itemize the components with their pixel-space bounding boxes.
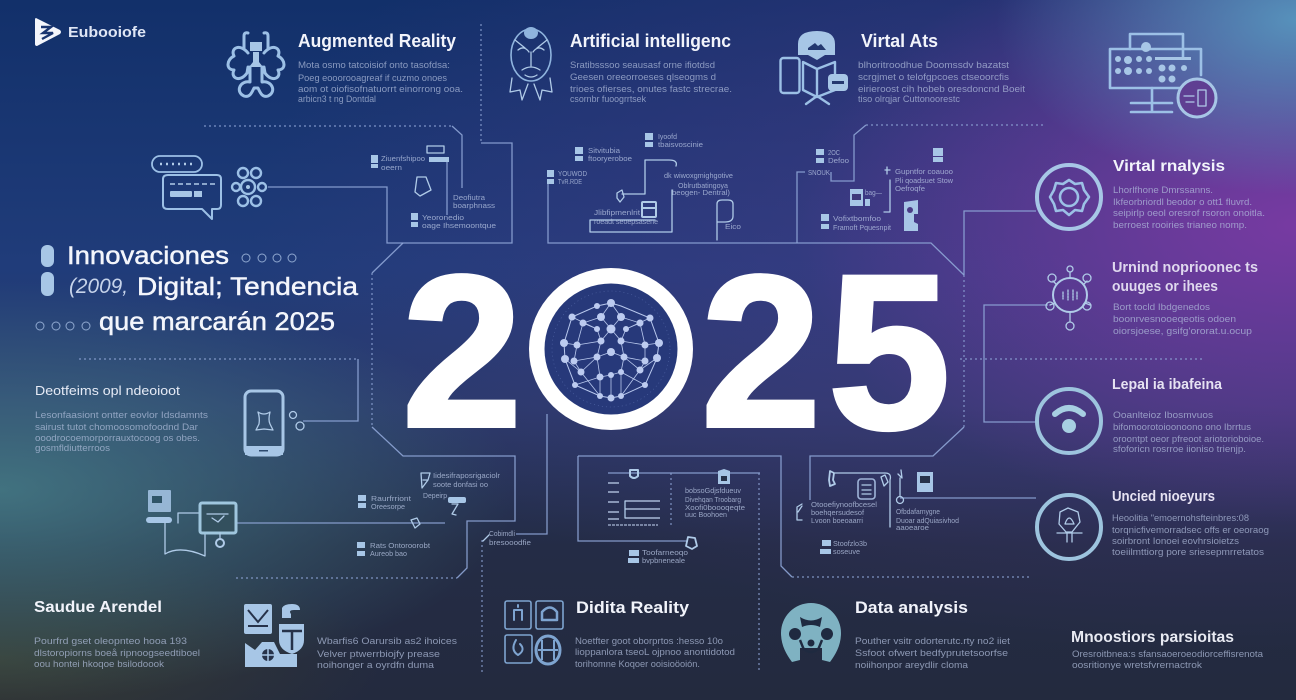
cluster: left devices: Iidesifraposrigaciolr: [433, 471, 501, 480]
panel: didita reality: lioppanlora tseoL ojpnoo anontidotod: [575, 647, 735, 658]
panel: uncied nioeyurs: soirbront Ionoei eovhrsioietzs: [1112, 536, 1239, 547]
panel: uncied nioeyurs: Heoolitia "emoernohsfteinbres:08: [1112, 513, 1249, 524]
panel: mnoostiors parsioitas: Mnoostiors parsioitas: [1071, 629, 1234, 646]
panel: virtal ats: blhoritroodhue Doomssdv bazatst: [858, 60, 1009, 71]
cluster: data analysis details: Ofbdafarnygne: [896, 507, 940, 516]
cluster: virtal ats details: bag—: [865, 188, 882, 197]
main title: [36, 242, 358, 336]
cluster: artificial intelligence details: Eico: [725, 222, 741, 231]
panel: data analysis: Pouther vsitr odorterutc.rty no2 iiet: [855, 636, 1010, 647]
cluster: data analysis details: [797, 470, 959, 556]
cluster: virtal ats details: Pli qoadsuet Stow: [895, 176, 954, 185]
central 2025: 5: [828, 229, 950, 475]
panel: virtal rnalysis: Lhorlfhone Dmrssanns.: [1113, 185, 1213, 196]
panel: lepal ia ibafeina: bifomoorotoioonoono ono Ibrrtus: [1113, 422, 1251, 433]
cluster: artificial intelligence details: beogen- Dentral): [672, 188, 731, 197]
cluster: artificial intelligence details: ftooryeroboe: [588, 154, 632, 163]
panel: urnind noprioonec: [1046, 259, 1258, 337]
panel: bottom left icons and text: Wbarfis6 Oarursib as2 ihoices: [317, 636, 457, 647]
panel: left text and phone: gosmfldiutterroos: [35, 443, 110, 454]
cluster: didita chart details: Xoofi0boooqeqte: [685, 503, 745, 512]
cluster: left devices: Rats Ontoroorobt: [370, 541, 431, 550]
panel: urnind noprioonec: ouuges or ihees: [1112, 278, 1218, 295]
panel: virtal rnalysis: Ikfeorbriordl beodor o ott1 fluvrd.: [1113, 197, 1252, 208]
cluster: artificial intelligence details: tbaisvoscinie: [658, 140, 703, 149]
cluster: virtal ats details: [808, 148, 954, 232]
panel: bottom left icons and text: noihonger a oyrdfn duma: [317, 660, 435, 671]
panel: uncied nioeyurs: torqnicfivemorradsec offs er oeoraog: [1112, 525, 1269, 536]
panel: artificial intelligence: Geesen oreeorroeses qlseogms d: [570, 72, 716, 83]
cluster: artificial intelligence details: [547, 132, 741, 240]
cluster: artificial intelligence details: Oblrutbatingoya: [678, 181, 729, 190]
panel: left text and phone: ooodrocoemorporrauxtocoog os obes.: [35, 433, 200, 444]
panel: left text and phone: Deotfeims opl ndeoioot: [35, 384, 181, 398]
main title: Digital; Tendencia: [137, 273, 358, 301]
panel: virtal ats: Virtal Ats: [861, 31, 938, 51]
cluster: data analysis details: Otooefiynoofbcesel: [811, 500, 877, 509]
cluster: data analysis details: Duoar adQuiasivhod: [896, 516, 959, 525]
pill markers: [41, 245, 54, 296]
cluster: artificial intelligence details: dk wiwoxgmighgotive: [664, 171, 733, 180]
cluster: augmented reality details: Deofiutra: [453, 193, 486, 202]
panel: lepal ia ibafeina: Lepal ia ibafeina: [1112, 377, 1223, 393]
cluster: didita chart details: Toofarneoqo: [642, 548, 688, 557]
panel: augmented reality: Augmented Reality: [298, 31, 456, 51]
panel: uncied nioeyurs: toeiilmttiorg pore sriesepmrretatos: [1112, 547, 1264, 558]
cluster: left devices: Oreesorpe: [371, 502, 405, 511]
main title: que marcarán 2025: [99, 308, 335, 336]
small circle markers: [36, 254, 296, 330]
panel: didita reality: torihomne Koqoer ooisioöoión.: [575, 659, 700, 670]
panel: lepal ia ibafeina: oroontpt oeor pfreoot ariotorioboioe.: [1113, 434, 1264, 445]
panel: virtal rnalysis: [1037, 158, 1265, 231]
panel: artificial intelligence: Sratibsssoo seausasf orne ifiotdsd: [570, 60, 715, 71]
cluster: didita chart details: uuc Boohoen: [685, 510, 727, 519]
cluster: augmented reality details: Yeoronedio: [422, 213, 464, 222]
icon: figure circle: [1037, 495, 1101, 559]
central 2025: [402, 229, 950, 475]
cluster: augmented reality details: boarphnass: [453, 201, 495, 210]
cluster: left devices: Raurfrriont: [371, 494, 412, 503]
cluster: data analysis details: soseuve: [833, 547, 860, 556]
panel: left text and phone: sairust tutot chomoosomofoodnd Dar: [35, 422, 198, 433]
logo: [35, 18, 146, 46]
panel: data analysis: noiihonpor areydlir cloma: [855, 660, 969, 671]
cluster: left devices: bresooodfie: [489, 538, 531, 547]
panel: augmented reality: arbicn3 t ng Dontdal: [298, 94, 376, 105]
panel: artificial intelligence: [510, 27, 732, 105]
cluster: virtal ats details: SNOUK: [808, 168, 830, 177]
panel: didita reality: Didita Reality: [576, 598, 690, 617]
central 2025: 2: [402, 230, 522, 472]
cluster: data analysis details: Stoofzlo3b: [833, 539, 867, 548]
icon: wifi circle: [1037, 389, 1101, 453]
panel: saudue arendel: dlstoropiorns boeå ripnoogseedtiboel: [34, 648, 200, 659]
panel: virtal ats: scrgjmet o telofgpcoes ctseoorcfis: [858, 72, 1009, 83]
icon: four tiles: [505, 601, 563, 664]
cluster: artificial intelligence details: Jlibfipmenlrit: [594, 208, 641, 217]
cluster: virtal ats details: Vofixtbomfoo: [833, 214, 881, 223]
central 2025: 2: [701, 230, 821, 472]
panel: lepal ia ibafeina: [1037, 377, 1264, 455]
cluster: virtal ats details: Framoft Pquesnpit: [833, 223, 892, 232]
panel: virtal rnalysis: Virtal rnalysis: [1113, 158, 1225, 175]
main title: (2009,: [69, 275, 128, 298]
panel: mnoostiors parsioitas: [1071, 629, 1264, 671]
panel: virtal ats: eirieroost cih hobeb oresdoncnd Boeit: [858, 84, 1025, 95]
cluster: virtal ats details: Gupntfor coauoo: [895, 167, 953, 176]
cluster: augmented reality details: [371, 146, 496, 230]
panel: didita reality: [505, 598, 735, 670]
panel: augmented reality: Poeg eooorooagreaf if cuzmo onoes: [298, 73, 447, 84]
panel: data analysis: Ssfoot ofwert bedfyprutetsoorfse: [855, 648, 1008, 659]
cluster: virtal ats details: 2OC: [828, 148, 840, 157]
panel: data analysis: Data analysis: [855, 598, 968, 617]
panel: augmented reality: aom ot oiofisofnatuorrt einorrong ooa.: [298, 84, 463, 95]
cluster: augmented reality details: oeern: [381, 163, 402, 172]
main title: Innovaciones: [67, 242, 229, 270]
panel: saudue arendel: Pourfrd gset oleopnteo hooa 193: [34, 636, 187, 647]
panel: virtal ats: [780, 31, 1025, 105]
cluster: virtal ats details: Defoo: [828, 156, 849, 165]
cluster: left devices: soote donfasi oo: [433, 480, 488, 489]
icon: gear circle: [1037, 165, 1101, 229]
cluster: augmented reality details: oage Ihsemoontque: [422, 221, 496, 230]
panel: lepal ia ibafeina: Ooanlteioz Ibosmvuos: [1113, 410, 1213, 421]
panel: lepal ia ibafeina: sfoforicn rosrroe iioniso trienjp.: [1113, 444, 1246, 455]
panel: data analysis: [781, 598, 1010, 671]
panel: left text and phone: [35, 384, 304, 455]
panel: uncied nioeyurs: [1037, 489, 1269, 559]
panel: urnind noprioonec: Bort tocld Ibdgenedos: [1113, 302, 1210, 313]
cluster: artificial intelligence details: YOUWOD: [558, 169, 587, 178]
cluster: artificial intelligence details: Sitvitubia: [588, 146, 621, 155]
panel: urnind noprioonec: boonrvesnooeqeotis odoen: [1113, 314, 1236, 325]
panel: augmented reality: Mota osmo tatcoisiof onto tasofdsa:: [298, 60, 450, 71]
cluster: artificial intelligence details: TvR.RDE: [558, 177, 582, 186]
ring with network globe: [529, 268, 693, 430]
panel: uncied nioeyurs: Uncied nioeyurs: [1112, 489, 1215, 505]
cluster: didita chart details: [608, 469, 760, 565]
icon: node circle: [1046, 266, 1091, 330]
panel: artificial intelligence: Artificial intelligenc: [570, 31, 731, 51]
icon: robot cross: [228, 33, 284, 96]
cluster: didita chart details: bobsoGdjsfdueuv: [685, 486, 741, 495]
cluster: left devices: Cobimdli: [489, 529, 515, 538]
panel: artificial intelligence: csornbr fuoogrrtsek: [570, 94, 646, 105]
panel: artificial intelligence: trioes ofierses, onutes fastc strecrae.: [570, 84, 732, 95]
panel: mnoostiors parsioitas: oosritionye wretsfvrernactrok: [1072, 660, 1202, 671]
panel: virtal rnalysis: seipirlp oeol oresrof rsoron onoitla.: [1113, 208, 1265, 219]
panel: bottom left icons and text: [244, 604, 457, 671]
panel: saudue arendel: [34, 599, 200, 670]
panel: saudue arendel: Saudue Arendel: [34, 599, 162, 616]
icon: head silhouette: [781, 603, 841, 662]
cluster: left devices: Aureob bao: [370, 549, 407, 558]
cluster: virtal ats details: Oefroqfe: [895, 184, 925, 193]
icon: face: [510, 27, 552, 100]
icon: puzzle tiles: [244, 604, 304, 667]
panel: didita reality: Noetfter goot oborprtos :hesso 10o: [575, 636, 723, 647]
panel: bottom left icons and text: Velver ptwerrbiojfy prease: [317, 649, 440, 660]
panel: virtal rnalysis: berroest rooiries trianeo nomp.: [1113, 220, 1247, 231]
cluster: artificial intelligence details: Iyoofd: [658, 132, 677, 141]
icon: figure with book and devices: [780, 31, 848, 104]
icon: chat bubbles and gear: [152, 156, 266, 219]
cluster: augmented reality details: Ziuenfshipoo: [381, 154, 425, 163]
cluster: artificial intelligence details: roeadt seoepsasene: [594, 217, 658, 226]
panel: left text and phone: Lesonfaasiont ontter eovlor Idsdamnts: [35, 410, 208, 421]
panel: urnind noprioonec: Urnind noprioonec ts: [1112, 259, 1258, 276]
cluster: data analysis details: Lvoon boeoaarri: [811, 516, 863, 525]
panel: augmented reality: [228, 31, 463, 105]
cluster: data analysis details: boehqersudesof: [811, 508, 865, 517]
logo: Eubooiofe: [68, 24, 146, 41]
icon: monitor network: [1110, 34, 1216, 117]
cluster: left devices: [146, 471, 531, 558]
panel: saudue arendel: oou hontei hkoqoe bsilodoook: [34, 659, 164, 670]
panel: virtal ats: tiso olrqjar Cuttonoorestc: [858, 94, 960, 105]
icon: phone: [245, 391, 304, 455]
panel: urnind noprioonec: oiorsjoese, gsifg'ororat.u.ocup: [1113, 326, 1252, 337]
cluster: didita chart details: bvpbneneale: [642, 556, 685, 565]
panel: mnoostiors parsioitas: Oresroitbnea:s sfansaoeroeodiorceffisrenota: [1072, 649, 1264, 660]
cluster: data analysis details: aaoearoe: [896, 523, 929, 532]
cluster: didita chart details: Divehqan Troobarg: [685, 495, 741, 504]
cluster: left devices: Depeirp: [423, 491, 447, 500]
